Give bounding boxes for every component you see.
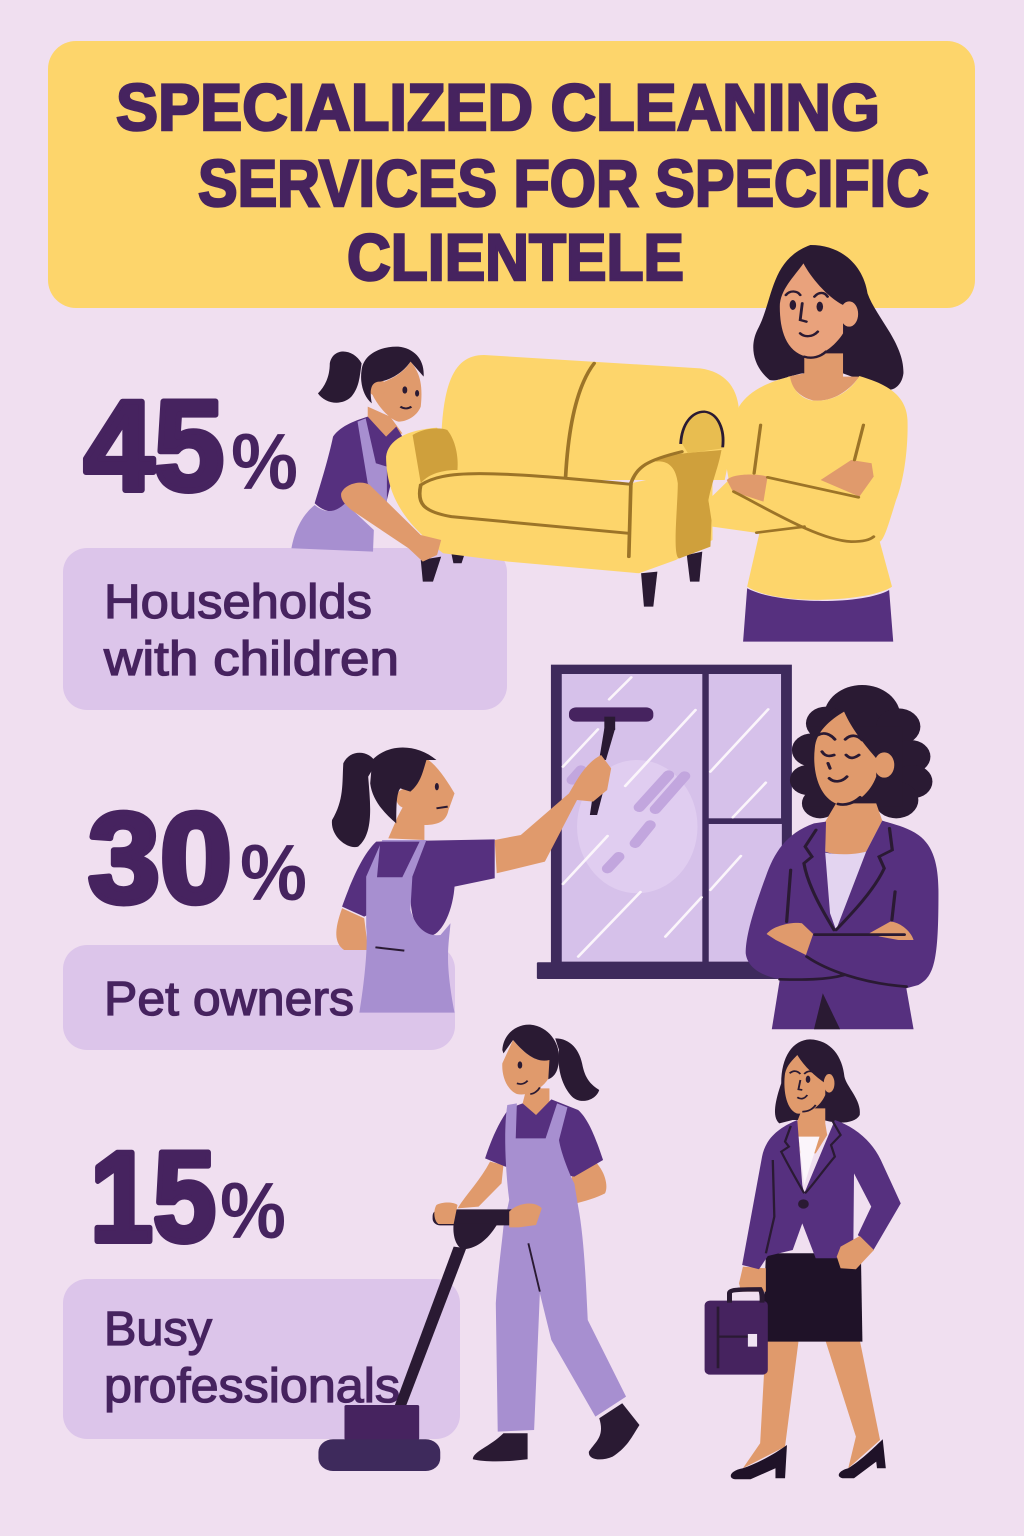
icon: briefcase xyxy=(705,1289,768,1375)
stat: 30%: 30 xyxy=(88,787,232,930)
illustration: cleaner lifting sofa xyxy=(291,347,739,607)
icon: floor polisher xyxy=(318,1209,535,1471)
panel: pet owners label xyxy=(63,945,455,1050)
title banner xyxy=(48,41,975,308)
illustration: woman with arms crossed in yellow sweater xyxy=(708,245,908,642)
stat: 45%: 45 xyxy=(84,375,224,518)
illustration: window with squeegee xyxy=(537,665,792,979)
illustration: woman in purple blazer with curly hair xyxy=(746,685,938,1029)
panel: households with children label xyxy=(63,548,507,710)
illustration: businesswoman with briefcase xyxy=(705,1039,901,1479)
stat: 45% xyxy=(84,375,298,518)
stat: 30%: % xyxy=(240,828,307,917)
panel: households with children label: with children xyxy=(103,633,399,686)
panel: pet owners label: Pet owners xyxy=(104,973,354,1026)
title: SPECIALIZED CLEANING xyxy=(116,70,880,144)
panel: busy professionals label: professionals xyxy=(104,1360,400,1413)
panel: households with children label: Households xyxy=(104,576,372,629)
panel: busy professionals label: Busy xyxy=(104,1303,212,1356)
stat: 30% xyxy=(88,787,307,930)
stat: 45%: % xyxy=(231,417,298,506)
title xyxy=(116,70,929,294)
panel: busy professionals label xyxy=(63,1279,460,1439)
icon: squeegee xyxy=(569,707,653,815)
stat: 15%: 15 xyxy=(90,1126,216,1269)
illustration: cleaner with floor polisher xyxy=(318,1025,639,1471)
stat: 15%: % xyxy=(220,1166,286,1255)
title: CLIENTELE xyxy=(347,220,684,294)
title: SERVICES FOR SPECIFIC xyxy=(198,146,929,220)
illustration: cleaner wiping window xyxy=(332,747,611,1013)
